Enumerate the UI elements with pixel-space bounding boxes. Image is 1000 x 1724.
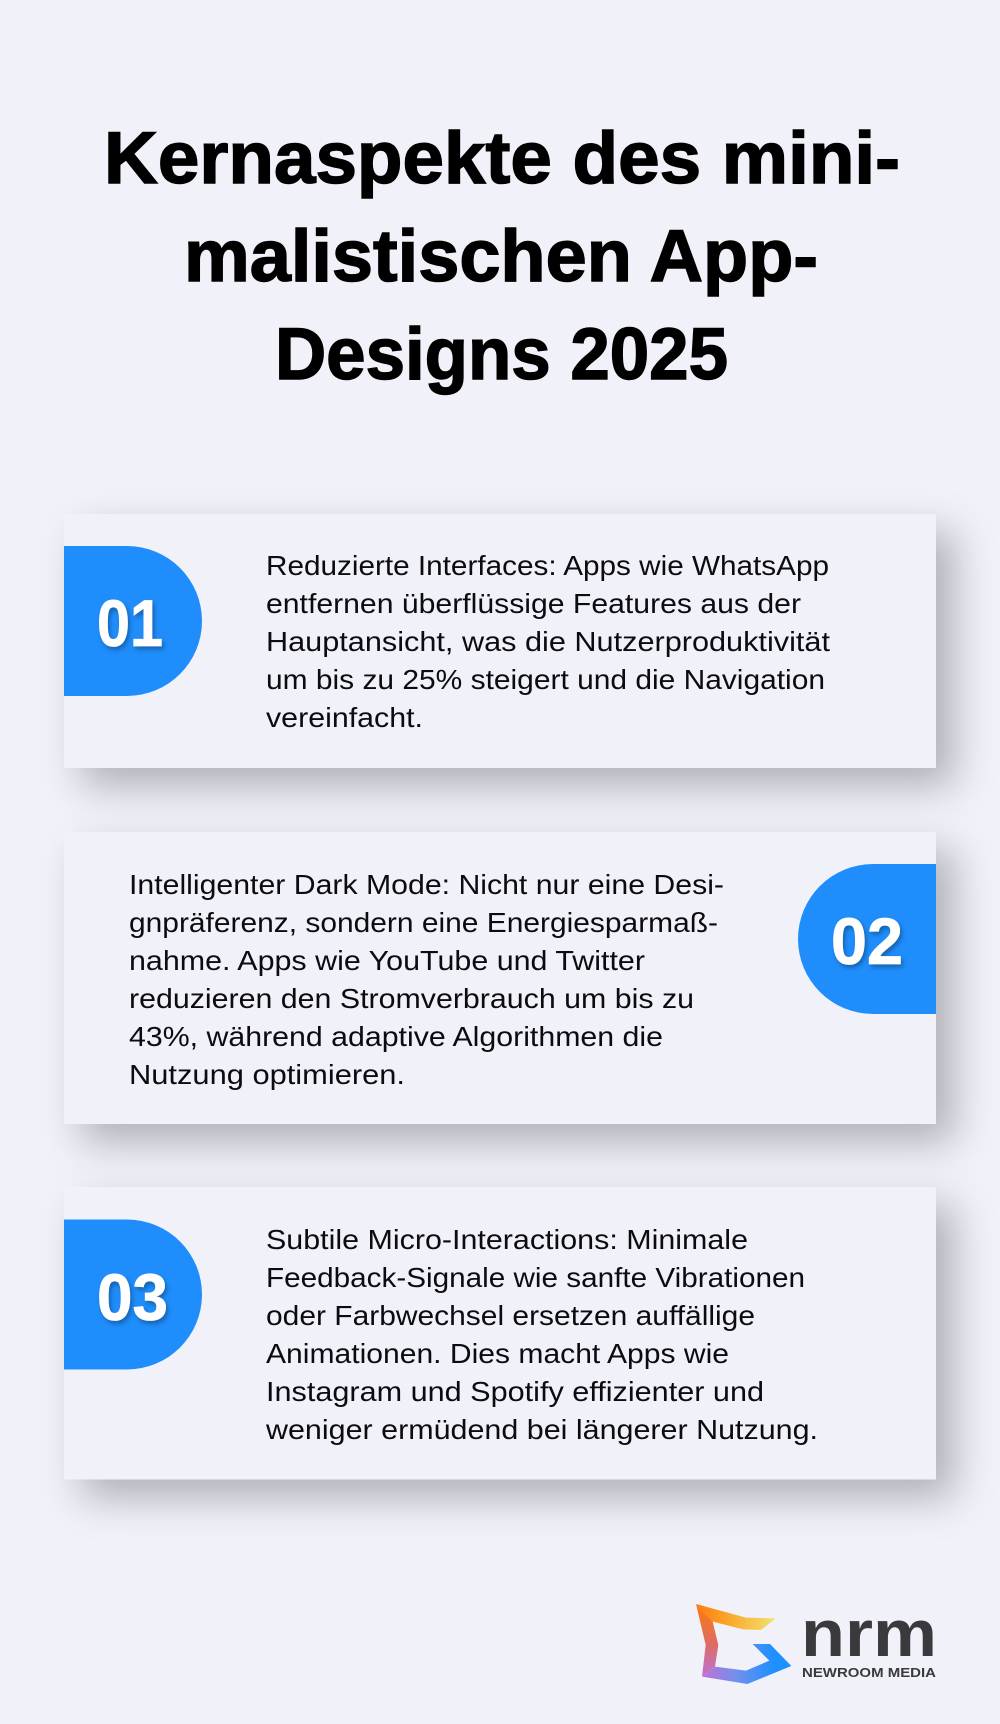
number badge 01: 01: [97, 586, 163, 660]
card 3 background: [64, 1187, 936, 1480]
card 1 text: entfernen überflüssige Features aus der: [266, 588, 801, 619]
card 3 text: oder Farbwechsel ersetzen auffällige: [266, 1300, 755, 1331]
title: Kernaspekte des mini-: [104, 118, 900, 199]
title: malistischen App-: [184, 216, 818, 297]
card 1 text: Hauptansicht, was die Nutzerproduktivität: [266, 626, 830, 657]
card 3 text: Subtile Micro-Interactions: Minimale: [266, 1224, 748, 1255]
card 2 text: nahme. Apps wie YouTube und Twitter: [129, 945, 645, 976]
card 1 background: [64, 514, 936, 768]
card 1 text: vereinfacht.: [266, 702, 423, 733]
title: Designs 2025: [275, 314, 728, 395]
number badge 02: [798, 864, 936, 1014]
logo: newroom media: [696, 1596, 937, 1684]
card 2 text: 43%, während adaptive Algorithmen die: [129, 1021, 663, 1052]
card 3 text: Feedback-Signale wie sanfte Vibrationen: [266, 1262, 805, 1293]
number badge 03: 03: [97, 1260, 168, 1334]
card 2 text: reduzieren den Stromverbrauch um bis zu: [129, 983, 694, 1014]
card 2 background: [64, 832, 936, 1124]
card 2 text: Intelligenter Dark Mode: Nicht nur eine Desi-: [129, 869, 724, 900]
number badge 01: [64, 546, 202, 696]
card 2 text: [129, 869, 724, 1090]
card 3 text: Instagram und Spotify effizienter und: [266, 1376, 764, 1407]
card 1 text: um bis zu 25% steigert und die Navigation: [266, 664, 825, 695]
number badge 03: [64, 1220, 202, 1370]
logo subtitle: NEWROOM MEDIA: [802, 1666, 936, 1680]
card 3 text: weniger ermüdend bei längerer Nutzung.: [265, 1414, 818, 1445]
card 1 text: Reduzierte Interfaces: Apps wie WhatsApp: [266, 550, 829, 581]
panel: 02 dark mode: [64, 832, 936, 1124]
panel: 03 micro-interactions: [64, 1187, 936, 1480]
panel: 01 reduced interfaces: [64, 514, 936, 768]
card 3 text: [265, 1224, 818, 1445]
logo wordmark: nrm: [801, 1596, 937, 1670]
card 2 text: Nutzung optimieren.: [129, 1059, 405, 1090]
number badge 02: 02: [831, 904, 903, 978]
card 1 text: [266, 550, 830, 733]
icon: logo mark: [696, 1604, 791, 1684]
card 3 text: Animationen. Dies macht Apps wie: [266, 1338, 729, 1369]
title: [104, 118, 900, 395]
card 2 text: gnpräferenz, sondern eine Energiesparmaß-: [129, 907, 718, 938]
